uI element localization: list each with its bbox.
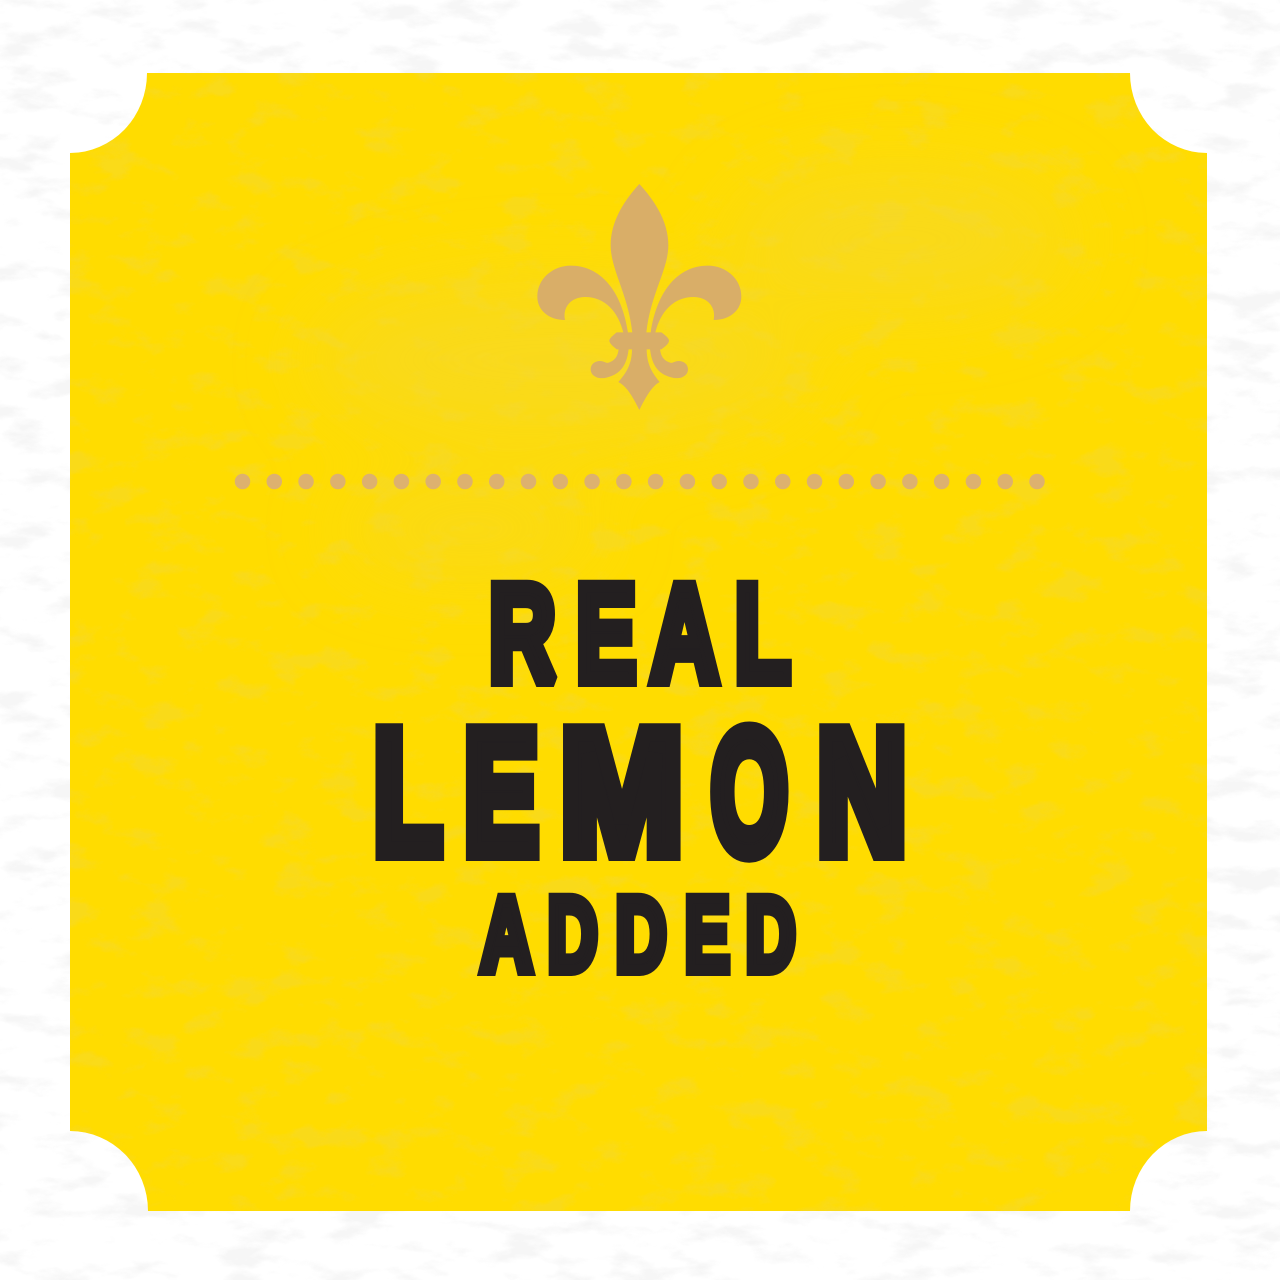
headline line: REAL: L	[735, 558, 790, 710]
headline line: REAL: E	[576, 558, 636, 710]
panel: yellow ticket card with notched corners	[70, 73, 1207, 1211]
headline line: ADDED: D	[746, 876, 796, 994]
headline: REAL LEMON ADDED	[374, 558, 906, 994]
headline line: LEMON: N	[817, 694, 906, 889]
dotted divider	[242, 474, 1040, 489]
headline line: ADDED: E	[685, 876, 730, 994]
headline line: REAL: A	[650, 558, 718, 710]
headline line: LEMON: L	[374, 694, 442, 889]
headline line: ADDED: A	[480, 876, 532, 994]
headline line: ADDED: D	[616, 876, 666, 994]
headline line: LEMON: M	[561, 694, 683, 889]
icon: fleur-de-lis	[537, 184, 741, 410]
headline line: REAL: R	[489, 558, 556, 710]
headline line: LEMON: O	[711, 694, 788, 889]
headline line: ADDED: D	[548, 876, 598, 994]
headline line: LEMON: E	[464, 694, 538, 889]
